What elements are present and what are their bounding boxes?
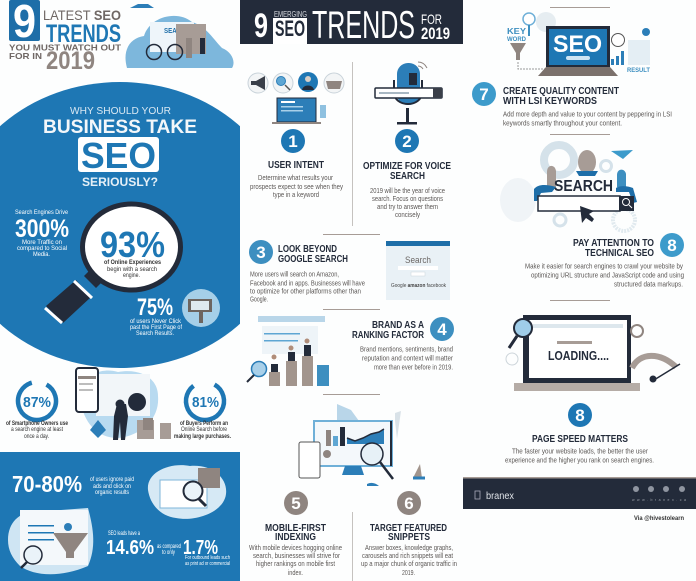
- heading: brand as a ranking factor: BRAND AS A: [372, 320, 424, 331]
- heading: trends: TRENDS: [46, 20, 121, 48]
- text: brand body: [360, 344, 453, 372]
- stat: 75 percent: Search Results.: [136, 330, 174, 337]
- illustration: person with phone and parcels: [76, 368, 171, 440]
- stat: 75 percent: past the First Page of: [130, 324, 182, 331]
- text: mobile-first body: With mobile devices hogging online: [249, 543, 342, 552]
- text: via credit: Via @hivestolearn: [634, 516, 684, 522]
- panel: voice search: [363, 62, 451, 219]
- stat: 14.6 percent: [106, 530, 154, 559]
- logo: branex: [475, 491, 514, 502]
- stat: 300 percent: Media.: [33, 251, 50, 258]
- badge: number 2: [395, 129, 419, 153]
- badge: number 8: [660, 233, 684, 257]
- heading: target featured snippets: [370, 523, 447, 543]
- text: voice search body: concisely: [395, 210, 420, 219]
- badge: number 4: 4: [437, 320, 447, 339]
- panel: left title: [9, 0, 122, 75]
- panel: why seo blue circle: [0, 82, 240, 368]
- illustration: search bar with people: [500, 145, 637, 231]
- text: look beyond body: to optimize for other platforms other than: [250, 286, 361, 296]
- heading: create quality content: CREATE QUALITY CONTENT: [503, 86, 619, 97]
- illustration: podium with people: [247, 316, 329, 386]
- text: brand body: reputation and context will matter: [362, 354, 453, 362]
- stat: 81 percent ring: Online Search before: [181, 427, 228, 433]
- badge: number 8: 8: [667, 236, 677, 255]
- heading: latest seo: LATEST SEO: [43, 7, 121, 23]
- panel: target featured snippets: [361, 491, 457, 577]
- stat: 87 percent ring: 87%: [23, 394, 51, 411]
- heading: look beyond google search: LOOK BEYOND: [278, 244, 337, 255]
- stat: 300 percent: Search Engines Drive: [15, 209, 68, 216]
- heading: user intent: USER INTENT: [268, 160, 324, 171]
- heading: emerging: EMERGING: [274, 10, 307, 19]
- panel: brand as a ranking factor: [247, 316, 454, 386]
- text: brand body: more than ever before in 2019.: [374, 362, 453, 372]
- icon: megaphone circle: [248, 73, 268, 93]
- stat: 81 percent ring: [174, 375, 231, 440]
- icon: search circle: [273, 73, 293, 93]
- stat: 87 percent ring: once a day.: [24, 434, 49, 440]
- text: look beyond body: More users will search on Amazon,: [250, 270, 339, 278]
- text: look beyond body: [250, 270, 365, 304]
- text: user intent body: [250, 173, 343, 199]
- heading: business take: BUSINESS TAKE: [43, 117, 197, 138]
- heading: page speed matters: PAGE SPEED MATTERS: [532, 434, 628, 445]
- icon: magnifying glass handle: [45, 270, 102, 323]
- stat: 87 percent ring: [6, 375, 69, 440]
- stat: 93 percent magnifier: [82, 204, 180, 290]
- stat: 1.7 percent: as print ad or commercial: [185, 561, 230, 567]
- panel: page speed: [505, 315, 680, 464]
- text: user intent body: type in a keyword: [273, 190, 319, 199]
- stat: 300 percent: 300%: [15, 215, 69, 243]
- text: look beyond body: Google.: [250, 294, 268, 304]
- stat: 93 percent magnifier: begin with a search: [107, 267, 157, 273]
- illustration: laptop: [272, 98, 326, 124]
- heading: mobile-first indexing: MOBILE-FIRST: [265, 523, 326, 534]
- panel: look beyond google: [249, 240, 450, 304]
- logo: branex: branex: [486, 491, 514, 502]
- illustration: search engine window: Search: [405, 255, 431, 265]
- illustration: search bar with people: SEARCH: [554, 178, 613, 195]
- text: page speed body: The faster your website loads, the better the user: [512, 446, 648, 456]
- icon: social icons: [633, 486, 685, 492]
- heading: look beyond google search: GOOGLE SEARCH: [278, 254, 348, 265]
- text: mobile-first body: index.: [288, 568, 303, 577]
- illustration: microphone and search bar: [375, 62, 442, 124]
- heading: mobile-first indexing: [265, 523, 326, 543]
- text: lsi body: keywords smartly throughout your content.: [503, 118, 622, 128]
- text: ignore paid ads: [90, 476, 134, 496]
- badge: number 1: 1: [288, 132, 298, 151]
- stat: 93 percent magnifier: 93%: [100, 224, 165, 265]
- text: website dots: www.branex.ca: [632, 498, 686, 502]
- stat: 93 percent magnifier: of Online Experiences: [104, 260, 162, 266]
- illustration: loading laptop: [506, 315, 643, 391]
- stat: 75 percent: 75%: [137, 294, 173, 321]
- heading: pay attention to technical seo: PAY ATTENTION TO: [573, 238, 654, 249]
- text: page speed body: experience and the higher you rank on search engines.: [505, 456, 654, 464]
- text: as compared to only: as compared: [157, 543, 181, 550]
- text: snippets body: carousels and rich snippets will eat: [362, 551, 454, 560]
- illustration: funnel and browser: [8, 508, 93, 574]
- stat: 14.6 percent: 14.6%: [106, 537, 154, 559]
- stat: 300 percent: [15, 209, 69, 258]
- illustration: clock, chart and results: [611, 28, 650, 74]
- badge: number 6: 6: [404, 494, 414, 513]
- text: snippets body: 2019.: [402, 568, 415, 577]
- heading: 2019: 2019: [421, 24, 450, 43]
- stat: 87 percent ring: a search engine at least: [11, 427, 63, 433]
- icon: person circle: [298, 72, 318, 92]
- text: snippets body: Answer boxes, knowledge graphs,: [365, 543, 453, 552]
- badge: number 8: [568, 403, 592, 427]
- illustration: monitor with magnifier: [148, 465, 226, 519]
- stat: 300 percent: compared to Social: [17, 245, 67, 252]
- footer: branex: [463, 477, 696, 509]
- badge: number 8: 8: [575, 406, 585, 425]
- heading: target featured snippets: TARGET FEATURED: [370, 523, 447, 534]
- panel: middle header: [240, 0, 463, 47]
- illustration: search engine window: [386, 241, 450, 300]
- stat: 81 percent ring: 81%: [192, 394, 219, 411]
- heading: look beyond google search: [278, 244, 348, 265]
- heading: mobile-first indexing: INDEXING: [275, 532, 316, 543]
- illustration: keyword funnel: [507, 12, 556, 69]
- illustration: clock, chart and results: RESULT: [627, 67, 650, 74]
- panel: technical seo: [500, 145, 684, 288]
- badge: number 3: 3: [256, 243, 266, 262]
- text: ignore paid ads: of users ignore paid: [90, 476, 134, 483]
- heading: why should your: WHY SHOULD YOUR: [70, 106, 171, 117]
- text: user intent body: prospects expect to see when they: [250, 182, 343, 191]
- badge: number 5: 5: [291, 494, 301, 513]
- badge: number 2: 2: [402, 132, 412, 151]
- illustration: keyword funnel: WORD: [507, 36, 526, 43]
- panel: user intent: [248, 72, 344, 199]
- text: user intent body: Determine what results your: [258, 173, 333, 182]
- illustration: seo laptop: [538, 26, 618, 76]
- heading: for in: FOR IN: [9, 51, 42, 61]
- heading: target featured snippets: SNIPPETS: [388, 532, 430, 543]
- text: mobile-first body: search, businesses will strive for: [253, 551, 340, 560]
- text: ignore paid ads: ads and click on: [93, 483, 131, 490]
- heading: for: FOR: [421, 11, 442, 27]
- icon: search results sign: [182, 289, 220, 327]
- stat: 81 percent ring: making large purchases.: [174, 434, 231, 440]
- panel: blue statistics box: [0, 452, 240, 581]
- heading: create quality content: [503, 86, 619, 107]
- text: technical body: structured data markups.: [614, 280, 683, 288]
- text: mobile-first body: higher rankings on mobile first: [256, 559, 336, 568]
- text: lsi body: [503, 110, 672, 128]
- text: voice search body: search. Focus on questions: [372, 194, 443, 203]
- text: voice search body: and try to answer them: [377, 202, 438, 211]
- text: voice search body: 2019 will be the year of voice: [370, 186, 445, 195]
- text: snippets body: up a major chunk of organic traffic in: [361, 559, 457, 568]
- illustration: search engine window: Google amazon facebook: [391, 283, 446, 289]
- panel: mobile-first indexing: [249, 491, 342, 577]
- illustration: search scene: [126, 4, 234, 68]
- badge: number 4: [430, 317, 454, 341]
- heading: pay attention to technical seo: [573, 238, 654, 259]
- text: technical body: [525, 262, 684, 288]
- badge: number 7: [472, 82, 496, 106]
- heading: you must watch out: YOU MUST WATCH OUT: [9, 42, 122, 52]
- panel: quality content lsi keywords: [472, 12, 672, 128]
- stat: 1.7 percent: For outbound leads such: [185, 555, 230, 561]
- illustration: seo laptop: SEO: [553, 31, 602, 58]
- text: brand body: Brand mentions, sentiments, brand: [360, 344, 453, 354]
- heading: create quality content: WITH LSI KEYWORDS: [503, 96, 597, 107]
- icon: basket circle: [324, 73, 344, 93]
- text: ignore paid ads: organic results: [95, 489, 129, 496]
- stat: 14.6 percent: SEO leads have a: [108, 530, 140, 537]
- stat: 87 percent ring: of Smartphone Owners use: [6, 421, 69, 427]
- illustration: loading laptop: LOADING....: [548, 348, 609, 363]
- heading: seo: SEO: [275, 16, 305, 41]
- text: page speed body: [505, 446, 654, 464]
- heading: 2019: 2019: [46, 47, 95, 75]
- stat: 81 percent ring: of Buyers Perform an: [180, 421, 228, 427]
- text: snippets body: [361, 543, 457, 577]
- heading: brand as a ranking factor: RANKING FACTOR: [352, 330, 425, 341]
- text: as compared to only: [157, 543, 181, 556]
- heading: optimize for voice search: SEARCH: [390, 171, 425, 182]
- stat: 75 percent: of users Never Click: [130, 318, 182, 325]
- stat: 300 percent: More Traffic on: [22, 239, 63, 246]
- stat: 93 percent magnifier: engine.: [123, 273, 140, 279]
- heading: optimize for voice search: OPTIMIZE FOR VOICE: [363, 161, 451, 172]
- text: mobile-first body: [249, 543, 342, 577]
- heading: pay attention to technical seo: TECHNICAL SEO: [585, 248, 654, 259]
- stat: 75 percent: [130, 298, 182, 335]
- illustration: search scene: SEARCH: [164, 28, 190, 35]
- illustration: keyword funnel: KEY: [507, 27, 527, 36]
- text: as compared to only: to only: [162, 549, 176, 556]
- stat: 70-80 percent: 70-80%: [12, 471, 82, 497]
- heading: seriously: SERIOUSLY?: [82, 175, 158, 189]
- illustration: analytics monitor and mobile: [299, 404, 425, 486]
- heading: optimize for voice search: [363, 161, 451, 182]
- badge: number 3: [249, 240, 273, 264]
- heading: nine: 9: [254, 7, 268, 45]
- stat: 1.7 percent: 1.7%: [183, 537, 218, 559]
- icon: speed gauge: [632, 356, 680, 382]
- badge: number 7: 7: [479, 85, 489, 104]
- text: look beyond body: Facebook and in apps. Businesses will have: [250, 278, 365, 288]
- text: voice search body: [370, 186, 445, 219]
- badge: seo: SEO: [81, 135, 156, 176]
- heading: brand as a ranking factor: [352, 320, 425, 341]
- heading: trends: TRENDS: [312, 4, 415, 47]
